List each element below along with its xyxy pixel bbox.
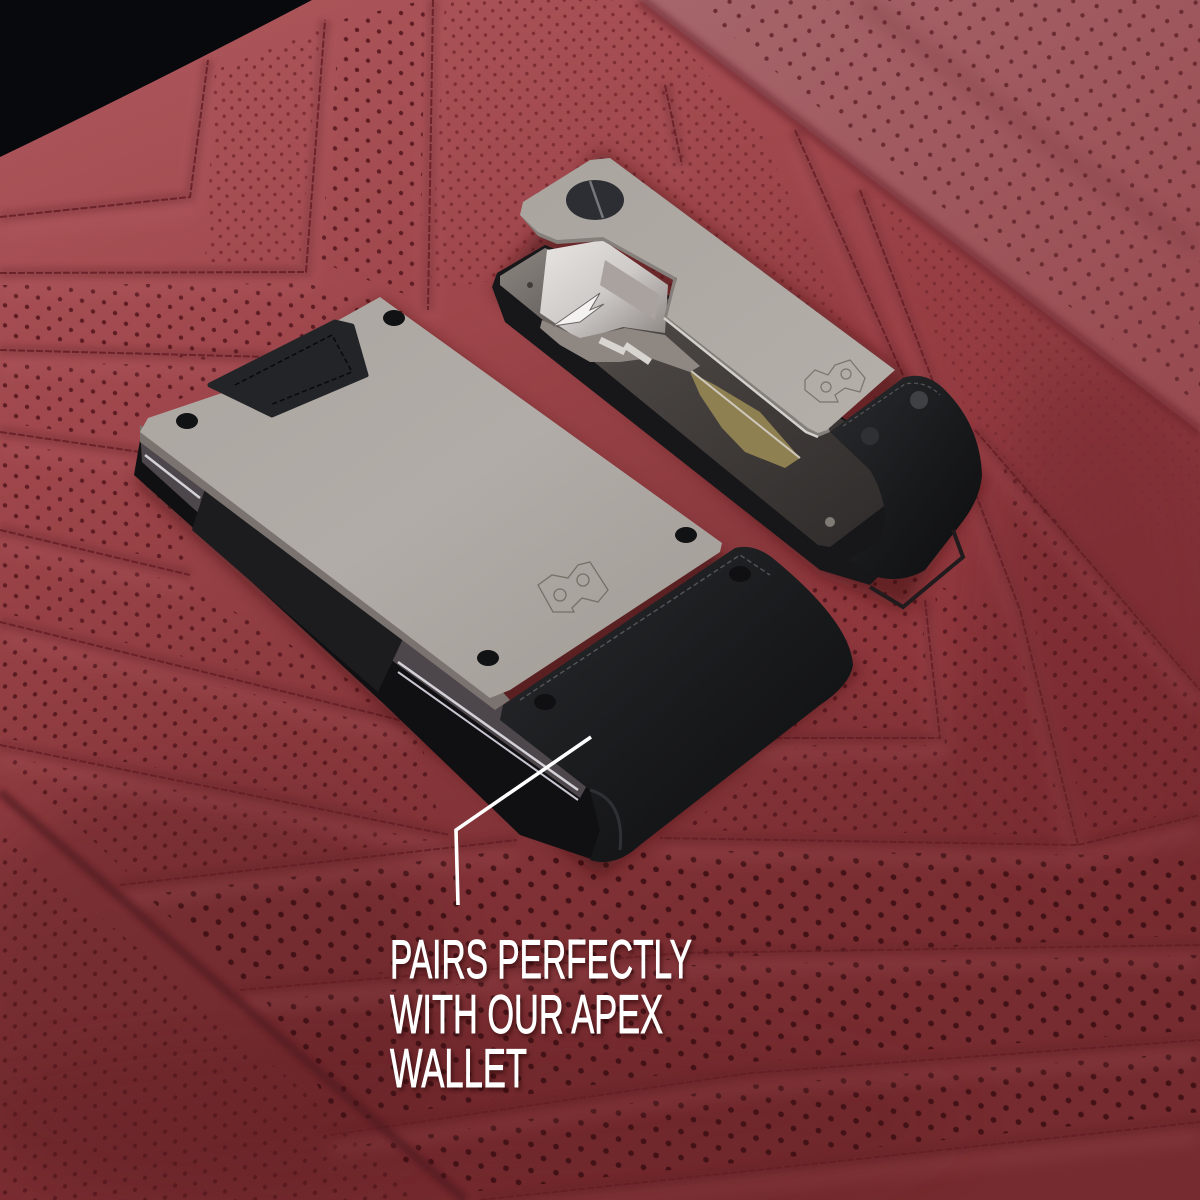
key organizer [492, 150, 985, 610]
engraved logo [538, 562, 608, 612]
top plate [140, 297, 722, 698]
card stack [140, 428, 590, 798]
screw [566, 180, 624, 220]
callout leader line [456, 737, 591, 905]
soft shadow [135, 300, 860, 875]
apex wallet [134, 297, 860, 875]
plate screws [176, 310, 697, 666]
engraved logo [805, 360, 865, 402]
callout text: WITH OUR APEX [390, 983, 663, 1045]
top plate side edge [520, 215, 830, 437]
stacked silver keys [540, 240, 668, 340]
soft shadow [492, 150, 985, 610]
metal ring [870, 530, 963, 607]
back plate [492, 245, 895, 585]
brass key [690, 372, 800, 468]
dark car interior corner [0, 0, 312, 157]
callout text: PAIRS PERFECTLY [390, 928, 692, 990]
upper right seat panel [640, 0, 1200, 432]
callout text: WALLET [390, 1037, 527, 1099]
plate edge [140, 425, 510, 710]
leather wrap [500, 547, 853, 862]
elastic band [192, 482, 408, 692]
leather loop [830, 376, 982, 579]
callout text [390, 928, 692, 1099]
wallet underside [134, 440, 600, 862]
pull tab [210, 322, 366, 415]
top plate [520, 158, 895, 433]
